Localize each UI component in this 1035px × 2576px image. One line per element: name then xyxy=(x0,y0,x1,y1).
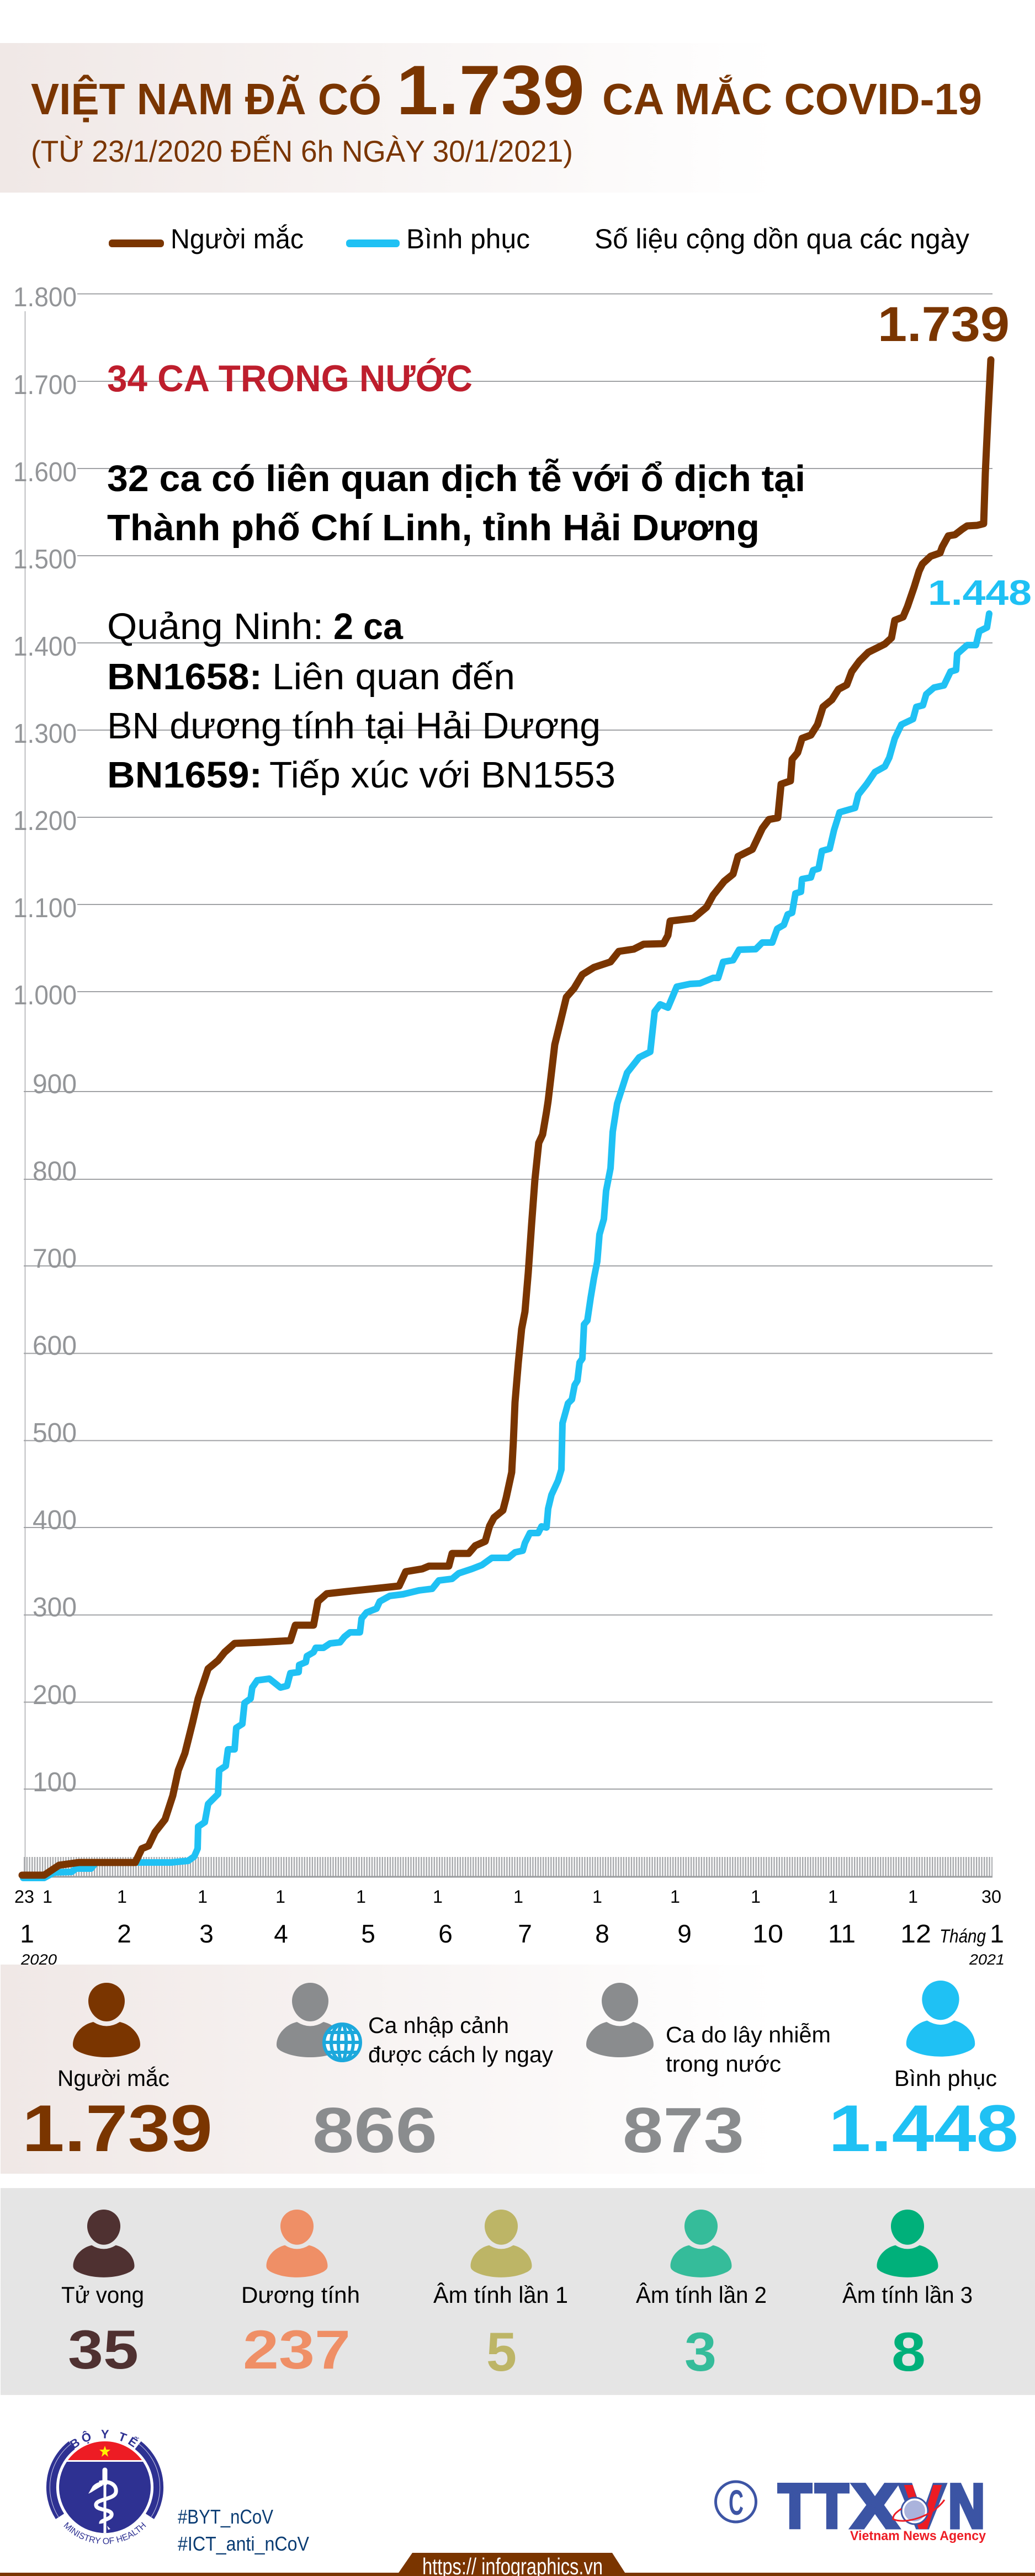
header panel xyxy=(0,43,1035,193)
stat: confirmed: Người mắc xyxy=(57,2066,169,2091)
stat: negative twice xyxy=(636,2210,767,2382)
legend: recovered xyxy=(346,223,530,254)
title: 1.739 xyxy=(396,51,585,129)
x axis month labels xyxy=(20,1919,1004,1948)
panel: patient status xyxy=(1,2188,1035,2395)
icon: person teal xyxy=(670,2210,732,2277)
stat: domestic cases: Ca do lây nhiễm xyxy=(666,2022,831,2047)
icon: person brown xyxy=(73,1983,140,2057)
stat: deaths xyxy=(61,2210,144,2380)
title: CA MẮC COVID-19 xyxy=(602,74,982,124)
x axis month labels: 12 xyxy=(900,1919,931,1948)
x axis day labels: 1 xyxy=(592,1887,602,1907)
y axis labels: 100 xyxy=(33,1768,77,1797)
stat: imported cases: Ca nhập cảnh xyxy=(368,2013,509,2038)
text: Quang Ninh cases: BN dương tính tại Hải Dương xyxy=(107,705,601,747)
stat: imported cases: 866 xyxy=(312,2094,437,2166)
text: Quang Ninh cases: Tiếp xúc với BN1553 xyxy=(269,754,615,796)
y axis labels: 1.000 xyxy=(13,981,77,1010)
stat: recovered xyxy=(829,1981,1018,2165)
hashtags: #BYT_nCoV xyxy=(178,2505,273,2528)
y axis labels: 200 xyxy=(33,1680,77,1710)
stat: domestic cases: trong nước xyxy=(666,2051,781,2077)
y axis labels xyxy=(13,283,77,1797)
x axis day labels: 1 xyxy=(433,1887,443,1907)
x axis month labels: 10 xyxy=(752,1919,783,1948)
stat: imported cases: được cách ly ngay xyxy=(368,2042,553,2067)
text: Quang Ninh cases: BN1659: xyxy=(107,754,262,796)
x axis month labels: 7 xyxy=(518,1919,532,1948)
legend note: Số liệu cộng dồn qua các ngày xyxy=(595,223,969,254)
x axis month labels: 8 xyxy=(595,1919,609,1948)
icon: copyright: C xyxy=(729,2483,744,2522)
icon: globe xyxy=(324,2024,360,2061)
logo: Ministry of Health: MINISTRY OF HEALTH xyxy=(63,2522,146,2544)
stat: negative twice: Âm tính lần 2 xyxy=(636,2282,767,2308)
logo: TTXVN: N xyxy=(948,2472,985,2541)
x axis day labels: 1 xyxy=(117,1887,127,1907)
month axis caption: Tháng xyxy=(940,1926,986,1947)
icon: person grey xyxy=(277,1983,344,2057)
icon: person orange xyxy=(266,2210,328,2277)
y axis labels: 1.200 xyxy=(13,806,77,836)
stat: recovered: 1.448 xyxy=(829,2091,1018,2165)
text: Quang Ninh cases xyxy=(107,606,615,796)
stat: negative once: Âm tính lần 1 xyxy=(433,2282,568,2308)
y axis labels: 700 xyxy=(33,1244,77,1274)
stat: domestic cases xyxy=(586,1983,831,2166)
legend xyxy=(109,223,969,254)
stat: positive: 237 xyxy=(243,2319,351,2380)
text: Hai Duong cluster: Thành phố Chí Linh, tỉnh Hải Dương xyxy=(107,507,760,549)
x axis month labels: 1 xyxy=(20,1919,34,1948)
x axis month labels: 9 xyxy=(677,1919,692,1948)
logo: Ministry of Health: BỘ Y TẾ xyxy=(70,2430,139,2449)
text: Quang Ninh cases: Quảng Ninh: xyxy=(107,606,323,647)
y axis labels: 300 xyxy=(33,1593,77,1622)
x axis month labels: 5 xyxy=(361,1919,375,1948)
x axis day labels: 1 xyxy=(828,1887,838,1907)
logo: TTXVN: T xyxy=(815,2472,848,2541)
year 2020: 2020 xyxy=(20,1951,57,1968)
stat: negative once: 5 xyxy=(486,2321,517,2382)
x axis month labels: 1 xyxy=(990,1919,1004,1948)
hashtags: #ICT_anti_nCoV xyxy=(178,2532,309,2555)
text: Quang Ninh cases: 2 ca xyxy=(333,606,404,647)
y axis labels: 900 xyxy=(33,1069,77,1099)
icon: person grey xyxy=(586,1983,654,2057)
logo: Ministry of Health xyxy=(46,2430,163,2544)
icon: person olive xyxy=(470,2210,532,2277)
x axis day labels: 30 xyxy=(981,1887,1001,1907)
y axis labels: 500 xyxy=(33,1418,77,1448)
x axis day labels: 1 xyxy=(356,1887,366,1907)
y axis labels: 1.600 xyxy=(13,457,77,487)
y axis labels: 1.500 xyxy=(13,545,77,574)
x axis day labels: 1 xyxy=(908,1887,918,1907)
y axis labels: 1.700 xyxy=(13,370,77,400)
x axis month labels: 11 xyxy=(828,1919,856,1948)
panel: totals xyxy=(1,1965,1035,2174)
x axis day labels: 1 xyxy=(43,1887,52,1907)
stat: recovered: Bình phục xyxy=(894,2066,997,2091)
x axis month labels: 4 xyxy=(274,1919,288,1948)
logo: TTXVN: T xyxy=(778,2472,811,2541)
stat: confirmed: 1.739 xyxy=(22,2091,213,2165)
y axis labels: 600 xyxy=(33,1331,77,1361)
legend: confirmed: Người mắc xyxy=(171,223,304,254)
x axis month labels: 2 xyxy=(117,1919,131,1948)
end value: recovered: 1.448 xyxy=(928,573,1032,613)
x axis day labels: 1 xyxy=(275,1887,285,1907)
y axis labels: 1.100 xyxy=(13,893,77,923)
stat: deaths: 35 xyxy=(68,2319,139,2380)
stat: positive: Dương tính xyxy=(241,2282,360,2308)
text: Quang Ninh cases: Liên quan đến xyxy=(272,656,515,698)
y axis labels: 400 xyxy=(33,1505,77,1535)
text block: domestic cases xyxy=(107,358,805,796)
stat: deaths: Tử vong xyxy=(61,2282,144,2308)
x axis day labels: 1 xyxy=(198,1887,208,1907)
hashtags xyxy=(178,2505,309,2555)
x axis day labels: 1 xyxy=(670,1887,680,1907)
stat: negative three times: 8 xyxy=(891,2321,926,2382)
stat: domestic cases: 873 xyxy=(623,2094,744,2166)
stat: positive xyxy=(241,2210,360,2380)
stat: negative twice: 3 xyxy=(684,2321,716,2382)
text: Quang Ninh cases: BN1658: xyxy=(107,656,262,698)
stat: negative three times xyxy=(842,2210,973,2382)
x axis day labels: 1 xyxy=(751,1887,761,1907)
year 2021: 2021 xyxy=(969,1951,1005,1968)
end value: confirmed: 1.739 xyxy=(878,296,1010,352)
footer bar xyxy=(0,2553,1035,2576)
y axis labels: 1.800 xyxy=(13,283,77,312)
logo: TTXVN: Vietnam News Agency xyxy=(850,2529,986,2543)
x axis day labels xyxy=(14,1887,1001,1907)
stat: negative three times: Âm tính lần 3 xyxy=(842,2282,973,2308)
icon: person green xyxy=(877,2210,938,2277)
logo: TTXVN: X xyxy=(852,2472,898,2541)
title: VIỆT NAM ĐÃ CÓ xyxy=(31,74,381,124)
icon: copyright xyxy=(715,2482,756,2522)
legend: confirmed xyxy=(109,223,304,254)
confirmed line xyxy=(22,360,991,1875)
y axis labels: 1.400 xyxy=(13,632,77,662)
x axis month labels: 6 xyxy=(438,1919,453,1948)
x axis month labels: 3 xyxy=(199,1919,214,1948)
icon: person dark xyxy=(73,2210,135,2277)
stat: negative once xyxy=(433,2210,568,2382)
title xyxy=(31,51,982,129)
logo: TTXVN: V xyxy=(900,2472,945,2541)
text: Hai Duong cluster xyxy=(107,458,805,549)
recovered line xyxy=(23,614,989,1878)
text: Hai Duong cluster: 32 ca có liên quan dịch tễ với ổ dịch tại xyxy=(107,458,805,499)
logo: TTXVN: V xyxy=(904,2471,942,2543)
icon: person blue xyxy=(906,1981,975,2057)
subtitle: (TỪ 23/1/2020 ĐẾN 6h NGÀY 30/1/2021) xyxy=(31,134,573,168)
x axis day labels: 1 xyxy=(513,1887,523,1907)
stat: imported cases xyxy=(277,1983,553,2166)
line chart xyxy=(13,283,1032,1968)
y axis labels: 1.300 xyxy=(13,719,77,749)
stat: confirmed xyxy=(22,1983,213,2165)
legend: recovered: Bình phục xyxy=(406,223,530,254)
heading: 34 domestic cases: 34 CA TRONG NƯỚC xyxy=(107,358,473,400)
x axis day labels: 23 xyxy=(14,1887,34,1907)
y axis labels: 800 xyxy=(33,1157,77,1186)
logo: TTXVN xyxy=(778,2471,986,2543)
